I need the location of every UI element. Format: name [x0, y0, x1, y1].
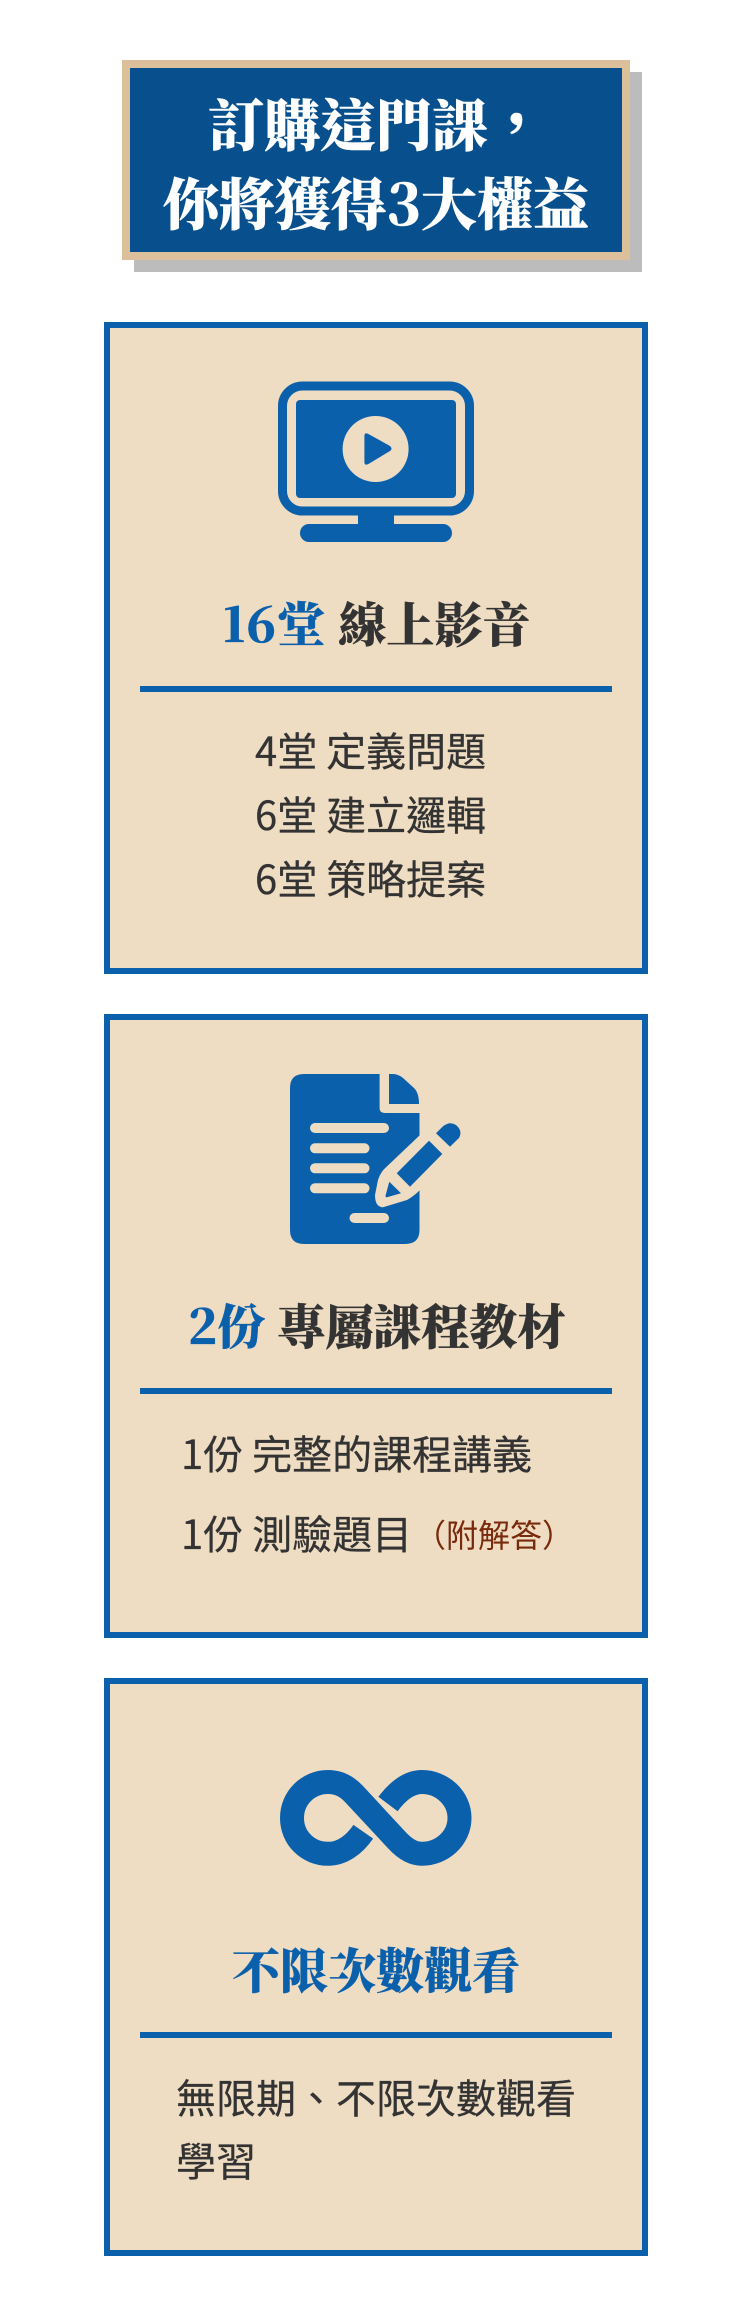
title text — [163, 83, 589, 242]
note: with answers: （附解答） — [414, 1511, 574, 1557]
list: video breakdown: 6堂 策略提案 — [255, 848, 486, 906]
icon: infinity — [280, 1770, 472, 1866]
list: materials: 1份 完整的課程講義 — [181, 1423, 532, 1481]
list: video breakdown: 4堂 定義問題 — [255, 720, 486, 778]
text: unlimited viewing description: 無限期、不限次數觀看 — [176, 2067, 576, 2125]
heading: 2 materials: 2份 專屬課程教材 — [188, 1289, 565, 1358]
title text: 你將獲得3大權益 — [163, 162, 589, 242]
heading: 16 videos: 16堂 線上影音 — [223, 587, 530, 656]
title banner — [122, 60, 642, 272]
panel: unlimited viewing — [104, 1678, 648, 2256]
title shadow — [134, 72, 642, 272]
title text: 訂購這門課， — [208, 83, 544, 163]
list: video breakdown — [255, 720, 486, 906]
list: materials: 1份 測驗題目 — [181, 1503, 412, 1561]
panel: online videos — [104, 322, 648, 974]
list: video breakdown: 6堂 建立邏輯 — [255, 784, 486, 842]
divider — [140, 1388, 612, 1394]
icon: document with pencil — [290, 1074, 460, 1244]
icon: monitor with play button — [278, 382, 474, 542]
text: unlimited viewing description — [176, 2067, 576, 2188]
divider — [140, 2032, 612, 2038]
divider — [140, 686, 612, 692]
list: materials — [181, 1423, 574, 1561]
heading: unlimited viewing: 不限次數觀看 — [232, 1933, 520, 2002]
title box — [122, 60, 630, 260]
panel: course materials — [104, 1014, 648, 1638]
text: unlimited viewing description: 學習 — [176, 2130, 256, 2188]
